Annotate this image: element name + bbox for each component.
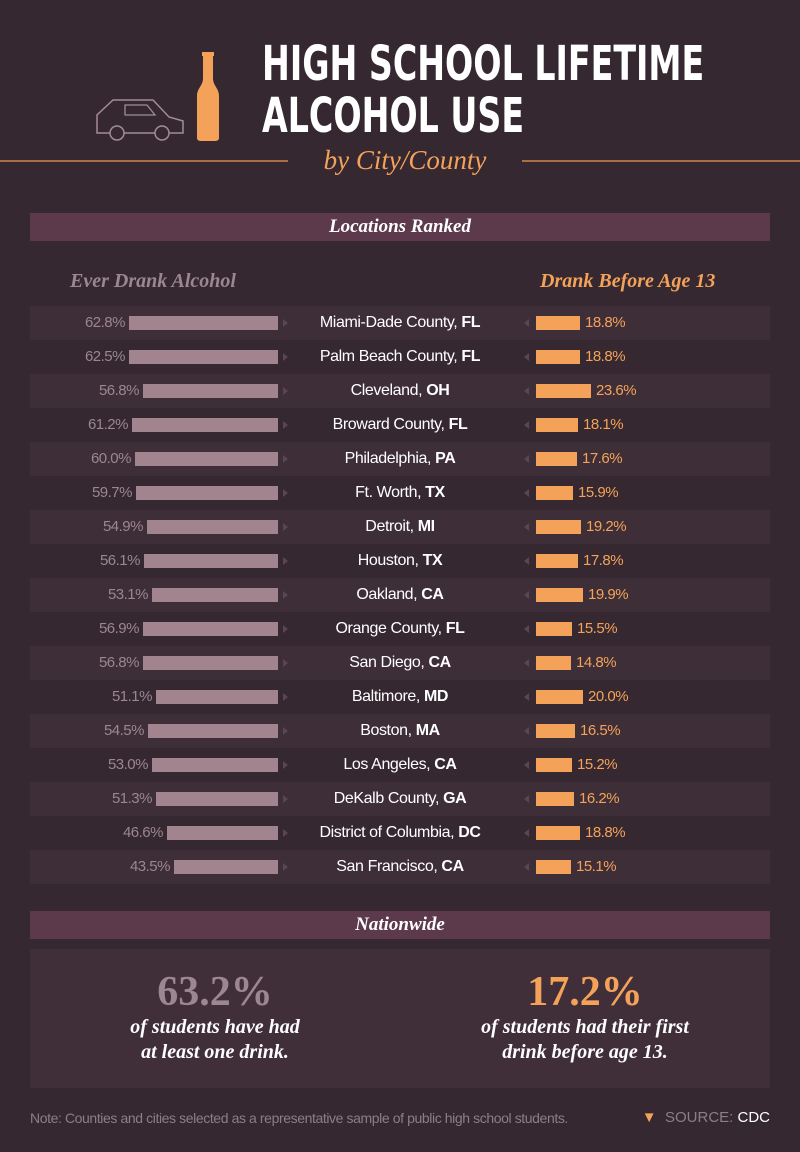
ranked rows: 17.6% — [582, 450, 622, 467]
title — [262, 36, 704, 144]
ranked rows: Palm Beach County, FL — [320, 348, 480, 365]
ranked rows: 62.5% — [85, 348, 125, 365]
column label: before 13: Drank Before Age 13 — [540, 270, 715, 292]
stat: before 13: drink before age 13. — [502, 1041, 668, 1063]
heading: locations ranked — [30, 213, 770, 241]
ranked rows: 56.9% — [99, 620, 139, 637]
source: ▼ SOURCE: CDC — [642, 1109, 770, 1126]
ranked rows: 61.2% — [88, 416, 128, 433]
panel: nationwide stats — [30, 949, 770, 1088]
stat: before 13: of students had their first — [481, 1016, 689, 1038]
stat: ever drank — [130, 969, 300, 1063]
ranked rows: 51.3% — [112, 790, 152, 807]
ranked rows: 15.5% — [577, 620, 617, 637]
ranked rows: District of Columbia, DC — [319, 824, 481, 841]
ranked rows: 56.1% — [100, 552, 140, 569]
ranked rows: Baltimore, MD — [352, 688, 448, 705]
ranked rows: San Francisco, CA — [336, 858, 464, 875]
ranked rows: Houston, TX — [358, 552, 442, 569]
ranked rows: Detroit, MI — [365, 518, 435, 535]
ranked rows: 15.2% — [577, 756, 617, 773]
title: HIGH SCHOOL LIFETIME — [262, 36, 704, 92]
heading: nationwide — [30, 911, 770, 939]
ranked rows: 16.5% — [580, 722, 620, 739]
ranked rows: 46.6% — [123, 824, 163, 841]
ranked rows: 54.9% — [103, 518, 143, 535]
heading: locations ranked: Locations Ranked — [329, 216, 471, 237]
ranked rows: 23.6% — [596, 382, 636, 399]
stat: before 13: 17.2% — [527, 969, 643, 1015]
ranked rows: Orange County, FL — [336, 620, 464, 637]
stat: ever drank: at least one drink. — [141, 1041, 289, 1063]
ranked rows: 18.8% — [585, 348, 625, 365]
ranked rows: Broward County, FL — [333, 416, 467, 433]
ranked rows: 18.8% — [585, 314, 625, 331]
ranked rows: 56.8% — [99, 654, 139, 671]
ranked rows: DeKalb County, GA — [334, 790, 466, 807]
ranked rows: Ft. Worth, TX — [355, 484, 445, 501]
ranked rows: Boston, MA — [360, 722, 440, 739]
ranked rows: 51.1% — [112, 688, 152, 705]
ranked rows: 18.1% — [583, 416, 623, 433]
ranked rows: 15.1% — [576, 858, 616, 875]
column label: ever drank: Ever Drank Alcohol — [70, 270, 236, 292]
ranked rows: Miami-Dade County, FL — [320, 314, 480, 331]
ranked rows: 54.5% — [104, 722, 144, 739]
ranked rows: Oakland, CA — [356, 586, 444, 603]
title: ALCOHOL USE — [262, 88, 524, 144]
stat: before 13 — [481, 969, 690, 1063]
heading: nationwide: Nationwide — [355, 914, 445, 935]
ranked rows: 59.7% — [92, 484, 132, 501]
ranked rows: Philadelphia, PA — [345, 450, 455, 467]
ranked rows: 60.0% — [91, 450, 131, 467]
ranked rows: Cleveland, OH — [351, 382, 449, 399]
stat: ever drank: of students have had — [130, 1016, 300, 1038]
ranked rows: 15.9% — [578, 484, 618, 501]
ranked rows: 43.5% — [130, 858, 170, 875]
ranked rows: 14.8% — [576, 654, 616, 671]
ranked rows — [30, 306, 770, 884]
ranked rows: 19.9% — [588, 586, 628, 603]
ranked rows: Los Angeles, CA — [343, 756, 457, 773]
ranked rows: 18.8% — [585, 824, 625, 841]
icon: bottle — [197, 52, 219, 141]
ranked rows: 53.0% — [108, 756, 148, 773]
ranked rows: 62.8% — [85, 314, 125, 331]
ranked rows: 16.2% — [579, 790, 619, 807]
note: Note: Counties and cities selected as a representative sample of public high school students. — [30, 1110, 568, 1126]
ranked rows: San Diego, CA — [349, 654, 451, 671]
ranked rows: 56.8% — [99, 382, 139, 399]
ranked rows: 20.0% — [588, 688, 628, 705]
subtitle: by City/County — [324, 145, 486, 175]
stat: ever drank: 63.2% — [157, 969, 273, 1015]
ranked rows: 19.2% — [586, 518, 626, 535]
ranked rows: 53.1% — [108, 586, 148, 603]
icon: car — [96, 99, 184, 141]
ranked rows: 17.8% — [583, 552, 623, 569]
